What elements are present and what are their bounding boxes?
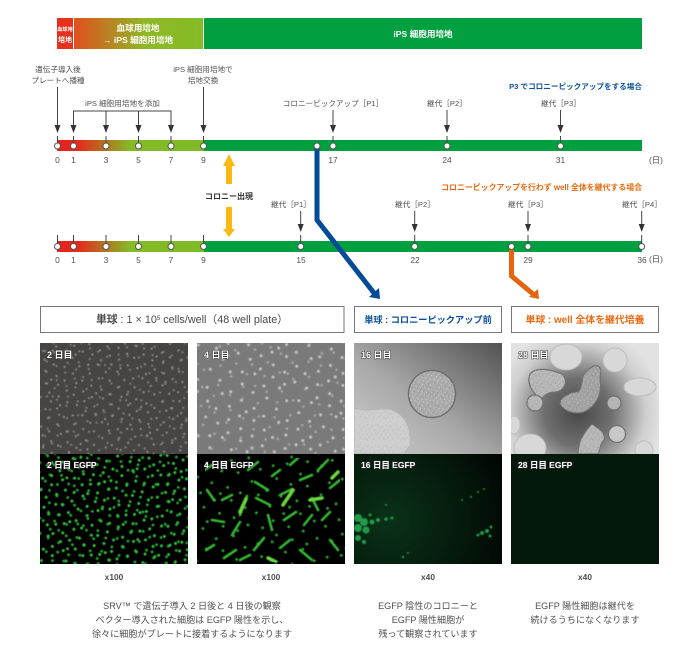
medium label: transition: 血球用培地 (117, 22, 160, 33)
photo: day 28 colonies (508, 343, 659, 462)
photo label: 16 日目 (361, 350, 392, 360)
condition box: left: 5 (157, 316, 161, 322)
condition box: whole-well: 単球 : well 全体を継代培養 (525, 313, 645, 326)
day numbers: 7 (169, 255, 174, 265)
timeline bar 2 (57, 241, 642, 252)
callout: medium exchange: iPS 細胞用培地で (173, 64, 233, 74)
day numbers: 3 (104, 255, 109, 265)
callout: seeding (31, 64, 85, 85)
arrows and ticks (54, 87, 564, 146)
day numbers: 15 (296, 255, 306, 265)
day numbers: 5 (136, 155, 141, 165)
photo: day 16 colony (354, 343, 502, 454)
day numbers: (日) (649, 254, 663, 264)
day numbers: 24 (442, 155, 452, 165)
callout: medium added: iPS 細胞用培地を添加 (85, 98, 160, 108)
day numbers (55, 155, 663, 165)
arrow: colony appears up (223, 154, 235, 184)
day numbers: 1 (71, 255, 76, 265)
day numbers: 22 (410, 255, 420, 265)
callout: seeding: プレートへ播種 (31, 75, 85, 85)
day numbers: 5 (136, 255, 141, 265)
magnification labels: x100 (105, 572, 124, 582)
photo label: 2 日目 (47, 350, 73, 360)
caption: colony pick-up: 残って観察されています (378, 628, 478, 639)
photo: day 28 EGFP (511, 454, 659, 564)
photo label: 28 日目 EGFP (518, 460, 573, 470)
day numbers: 1 (71, 155, 76, 165)
day numbers (55, 254, 663, 265)
medium label: iPS medium: iPS 細胞用培地 (393, 28, 453, 39)
condition box: left: cells/well（48 well plate） (160, 313, 288, 326)
condition box: left (40, 306, 344, 332)
day numbers: 9 (201, 155, 206, 165)
timeline bar 1 (57, 140, 642, 151)
photo label: 2 日目 EGFP (47, 460, 97, 470)
condition box: whole-well (512, 306, 658, 332)
day numbers: 17 (328, 155, 338, 165)
label: colony appears: コロニー出現 (205, 191, 253, 201)
photo: day 4 phase contrast (197, 343, 345, 454)
day numbers: 7 (169, 155, 174, 165)
arrows and ticks (58, 211, 645, 246)
scenario heading blue: P3 でコロニーピックアップをする場合 (509, 81, 642, 91)
condition box: left: 単球 : 1 × 10 (96, 314, 157, 326)
callout: colony pick-up P1: コロニーピックアップ［P1］ (283, 99, 383, 108)
photo label: 4 日目 EGFP (204, 460, 254, 470)
callout: seeding: 遺伝子導入後 (35, 64, 81, 74)
timeline 2: whole-well passage (54, 182, 663, 265)
arrow: blue to colony pick-up photos (314, 143, 380, 299)
photo: day 2 EGFP (40, 454, 188, 564)
magnification labels: x40 (421, 572, 435, 582)
callout: P3: 継代［P3］ (541, 98, 581, 108)
medium schedule bar (57, 18, 642, 49)
medium label: transition: → iPS 細胞用培地 (103, 34, 173, 45)
caption: days 2 and 4: 徐々に細胞がプレートに接着するようになります (92, 628, 292, 639)
day numbers: 9 (201, 255, 206, 265)
day numbers: 31 (556, 155, 565, 165)
caption: days 2 and 4: SRV™ で遺伝子導入 2 日後と 4 日後の観察 (103, 600, 281, 611)
scenario heading orange: コロニーピックアップを行わず well 全体を継代する場合 (441, 182, 642, 192)
callout: P2: 継代［P2］ (427, 98, 467, 108)
arrow: colony appears down (223, 207, 235, 237)
photo label: 4 日目 (204, 350, 230, 360)
medium label: transition (103, 22, 173, 45)
medium schedule bar: 培地 (58, 35, 72, 44)
photo label: 28 日目 (518, 350, 549, 360)
day numbers: 3 (104, 155, 109, 165)
caption: whole-well passage: EGFP 陽性細胞は継代を (535, 600, 635, 611)
condition box: colony pick-up: 単球 : コロニーピックアップ前 (364, 314, 492, 325)
callout: medium exchange: 培地交換 (188, 75, 219, 85)
day numbers: 29 (523, 255, 533, 265)
caption: whole-well passage: 続けるうちになくなります (530, 614, 640, 625)
day numbers: 0 (55, 155, 60, 165)
callouts: passages: 継代［P3］ (508, 199, 548, 209)
photo: day 2 phase contrast (40, 343, 188, 454)
day numbers: 36 (637, 255, 647, 265)
timeline 1: P3 colony pick-up (31, 64, 663, 165)
magnification labels: x100 (262, 572, 281, 582)
photo label: 16 日目 EGFP (361, 460, 416, 470)
arrow: orange to whole-well photos (508, 244, 539, 299)
magnification labels: x40 (578, 572, 592, 582)
day numbers: 0 (55, 255, 60, 265)
day numbers: (日) (649, 155, 663, 165)
caption: colony pick-up: EGFP 陰性のコロニーと (378, 600, 478, 611)
medium label: blood cell medium: 血球用 (57, 25, 73, 33)
condition box: colony pick-up (354, 306, 502, 332)
caption: whole-well passage (530, 600, 640, 625)
photo: day 4 EGFP (197, 454, 345, 564)
callouts: passages (271, 199, 662, 209)
day markers (54, 143, 564, 149)
caption: days 2 and 4: ベクター導入された細胞は EGFP 陽性を示し、 (96, 614, 288, 625)
callouts: passages: 継代［P2］ (395, 199, 435, 209)
magnification labels (105, 572, 592, 582)
callout: medium exchange (173, 64, 233, 85)
caption: days 2 and 4 (92, 600, 292, 639)
caption: colony pick-up (378, 600, 478, 639)
caption: colony pick-up: EGFP 陽性細胞が (392, 614, 464, 625)
photo: day 16 EGFP (354, 454, 502, 564)
callouts: passages: 継代［P1］ (271, 199, 311, 209)
day markers (54, 244, 645, 250)
callouts: passages: 継代［P4］ (622, 199, 662, 209)
